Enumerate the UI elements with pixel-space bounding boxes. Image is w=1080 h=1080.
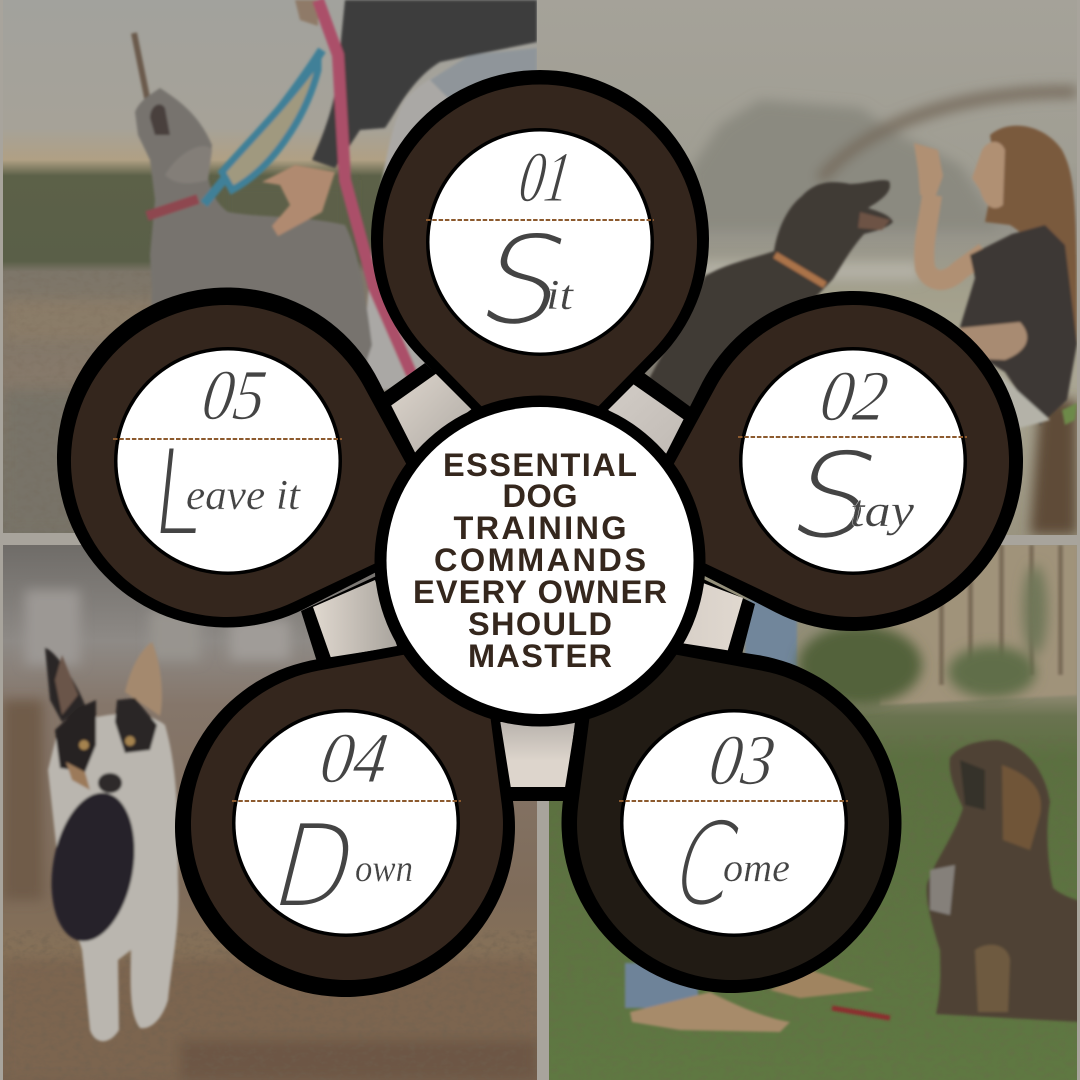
photo: terrier looking up on a lawn (549, 545, 1080, 1080)
title: MASTER (468, 638, 612, 674)
petal 04: Down: D (261, 801, 370, 932)
petal 04: Down: 04 (316, 718, 393, 798)
petal 02: Stay: S (778, 429, 892, 564)
petal 05: Leave it: L (147, 426, 209, 561)
petal 02: Stay (572, 247, 1067, 697)
photo: border collie carrying a frisbee (3, 545, 537, 1080)
title: ESSENTIAL (443, 447, 637, 483)
petal 02: Stay: tay (850, 485, 915, 536)
title: SHOULD (468, 606, 612, 642)
petal 05: Leave it: eave it (186, 473, 301, 519)
petal 01: Sit (371, 70, 709, 478)
petal 03: Come: ome (723, 845, 790, 890)
petal 01: Sit: S (467, 211, 582, 351)
center circle white face (386, 407, 694, 714)
center circle (374, 396, 706, 726)
petal 01: Sit: it (546, 273, 575, 319)
petal 05: Leave it (13, 243, 508, 693)
photo: weimaraner catching a stick with handler (3, 0, 537, 533)
petal 04: Down (108, 533, 624, 1064)
title: EVERY OWNER (413, 574, 667, 610)
photo: woman training black labrador (644, 74, 1077, 535)
title: DOG (502, 478, 578, 514)
title: TRAINING (454, 510, 626, 546)
title: COMMANDS (434, 542, 646, 578)
petal 01: Sit: 01 (515, 137, 576, 217)
petal 02: Stay: 02 (816, 356, 893, 436)
petal 04: Down: own (355, 848, 413, 890)
title (413, 447, 667, 674)
connector frame: black pentagon struts (301, 363, 755, 801)
petal 03: Come (453, 529, 969, 1060)
petal 03: Come: 03 (705, 720, 780, 800)
connector panels: light beige facets (313, 373, 743, 787)
petal 05: Leave it: 05 (198, 355, 271, 435)
petal 03: Come: C (661, 799, 750, 930)
